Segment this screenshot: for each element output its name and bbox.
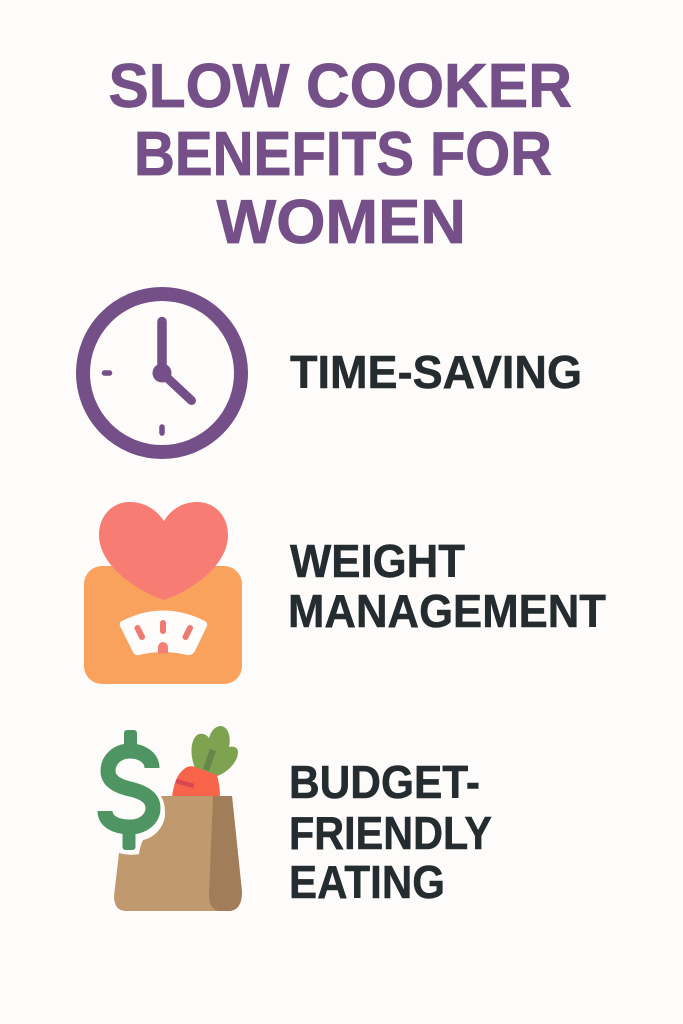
icon part: bag side panel (209, 796, 242, 911)
label: budget-friendly eating: FRIENDLY (289, 807, 492, 859)
icon part: carrot leaves (191, 726, 238, 776)
title: COOKER (306, 52, 572, 121)
title: SLOW (108, 52, 290, 121)
label: weight management (288, 535, 606, 637)
label: budget-friendly eating: BUDGET- (289, 756, 480, 808)
title: FOR (430, 120, 552, 189)
icon part: carrot stem (206, 750, 213, 770)
label: weight management: MANAGEMENT (288, 585, 606, 637)
label: weight management: WEIGHT (290, 535, 465, 587)
icon part: carrot (172, 766, 220, 797)
icon: clock (83, 294, 241, 452)
icon part: carrot stripe (176, 781, 194, 786)
label: time-saving: TIME-SAVING (290, 346, 582, 398)
icon part: paper bag (114, 796, 242, 911)
title (108, 52, 572, 257)
title: BENEFITS (134, 120, 414, 189)
icon: grocery bag with dollar and carrot (105, 726, 242, 911)
icon: scale with heart (84, 502, 242, 684)
icon part: dollar sign (105, 730, 153, 850)
title: WOMEN (216, 188, 466, 257)
label: budget-friendly eating (289, 756, 492, 908)
label: budget-friendly eating: EATING (289, 856, 445, 908)
